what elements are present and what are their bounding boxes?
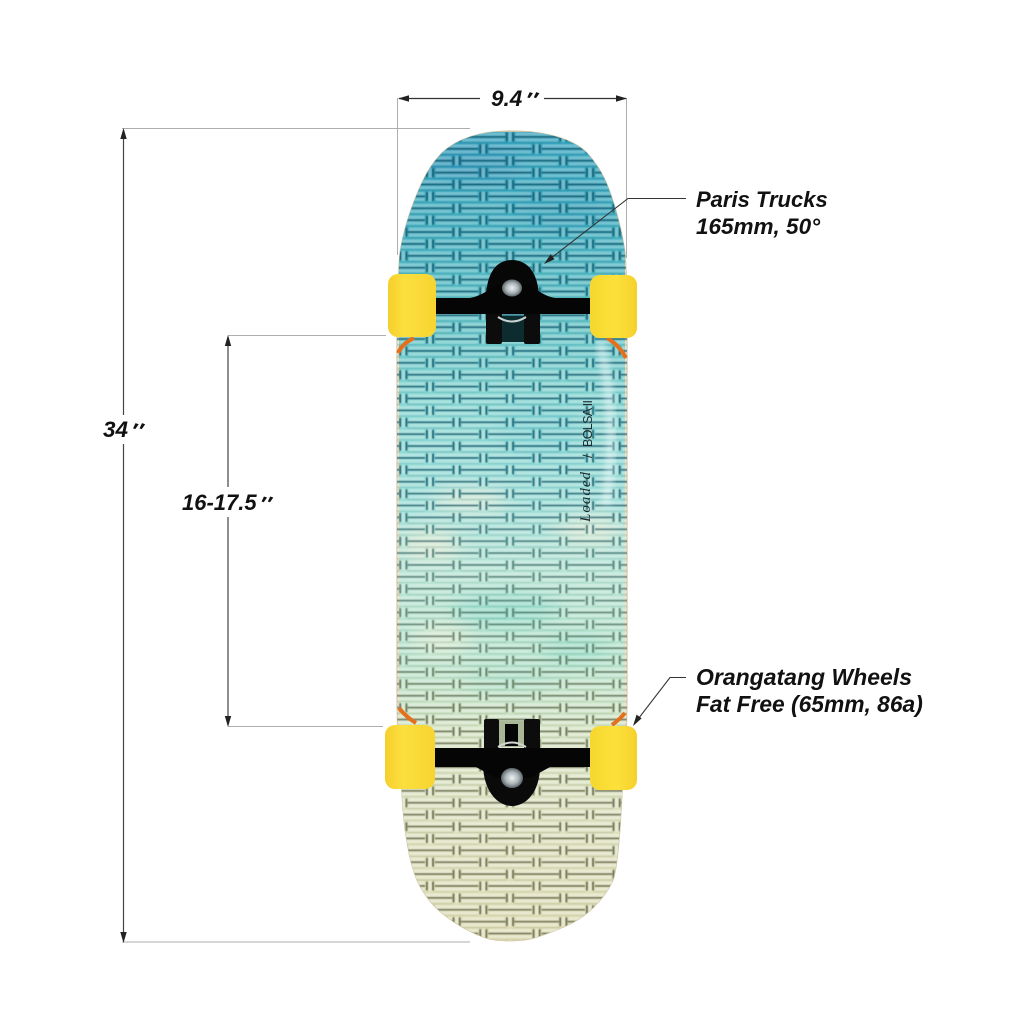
graphic text on deck: Loaded [578, 471, 594, 523]
width dimension [398, 86, 627, 258]
wheel: rear left [385, 725, 435, 789]
wheel cutout accents [398, 338, 626, 725]
callout: trucks [544, 187, 828, 264]
callout: trucks: Paris Trucks [696, 187, 828, 212]
wheel: front right [590, 275, 637, 338]
risers [484, 719, 499, 751]
callout: wheels [633, 664, 923, 726]
kingpin bolt [501, 768, 523, 788]
gloss reflection [600, 342, 611, 505]
deck [395, 128, 630, 943]
graphic text on deck [578, 400, 595, 523]
baseplate dome [483, 766, 540, 806]
wheel: front left [388, 274, 436, 337]
callout: wheels: Orangatang Wheels [696, 664, 912, 690]
front truck [434, 260, 591, 344]
callout: wheels: Fat Free (65mm, 86a) [696, 691, 923, 717]
width dimension: 9.4′′ [491, 86, 542, 113]
wheels [385, 274, 637, 790]
wheelbase dimension: 16-17.5′′ [182, 490, 276, 517]
length dimension [103, 128, 470, 943]
wheelbase dimension [182, 335, 386, 727]
kingpin bolt [502, 280, 522, 296]
wheel: rear right [590, 726, 637, 790]
graphic text on deck: / [581, 454, 595, 458]
risers [486, 312, 502, 344]
colour blotches [400, 145, 624, 692]
graphic text on deck: BOLSA II [581, 400, 595, 447]
hanger [431, 748, 590, 778]
weave texture [395, 128, 630, 943]
rear truck [431, 719, 590, 806]
length dimension: 34′′ [103, 417, 147, 444]
callout: trucks: 165mm, 50° [696, 214, 821, 239]
baseplate dome [486, 260, 539, 300]
hanger [434, 284, 591, 314]
